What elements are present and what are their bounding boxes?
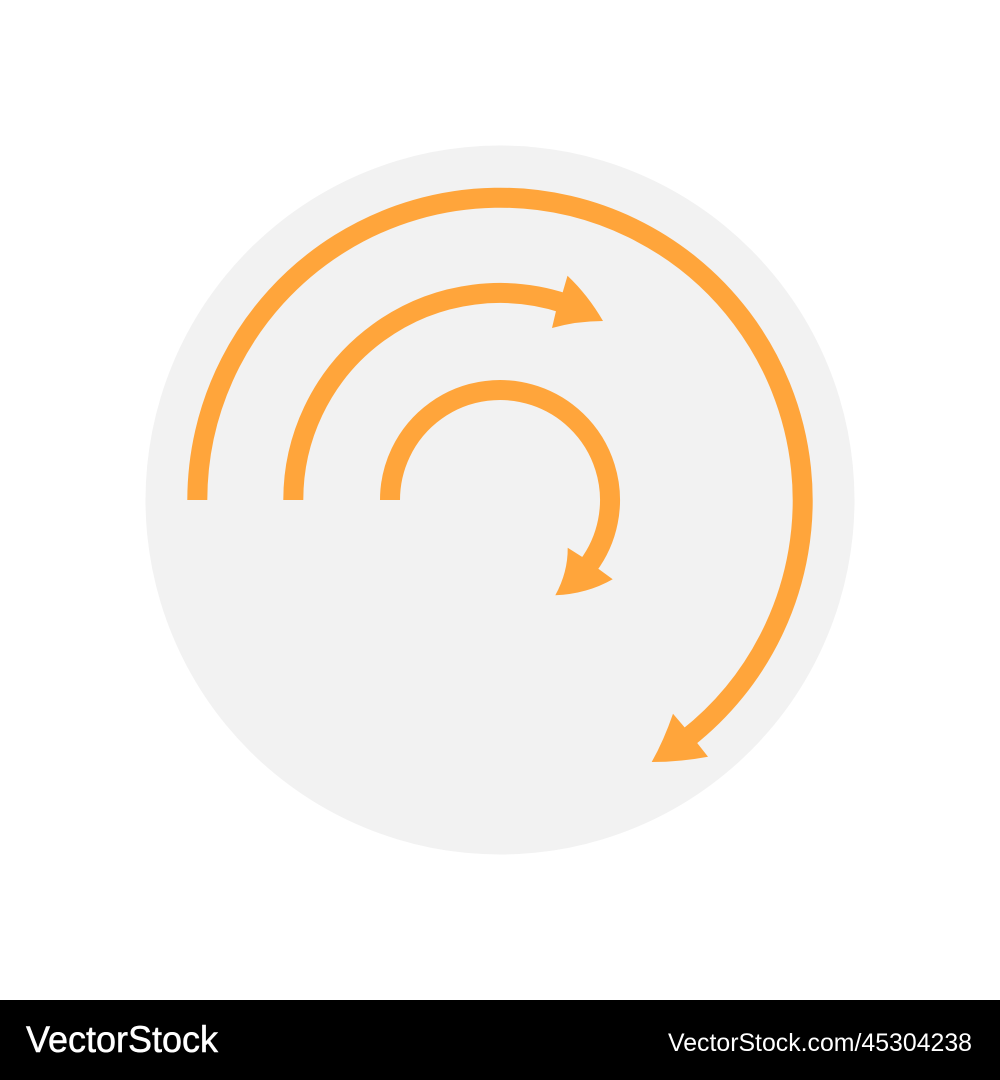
middle arrow	[293, 276, 603, 500]
outer arrow	[197, 198, 803, 762]
footer image id: VectorStock.com/45304238	[668, 1029, 972, 1057]
inner arrow	[390, 390, 613, 595]
footer logo text: VectorStock	[26, 1019, 218, 1060]
background circle	[146, 146, 854, 854]
footer bar	[0, 1000, 1000, 1080]
